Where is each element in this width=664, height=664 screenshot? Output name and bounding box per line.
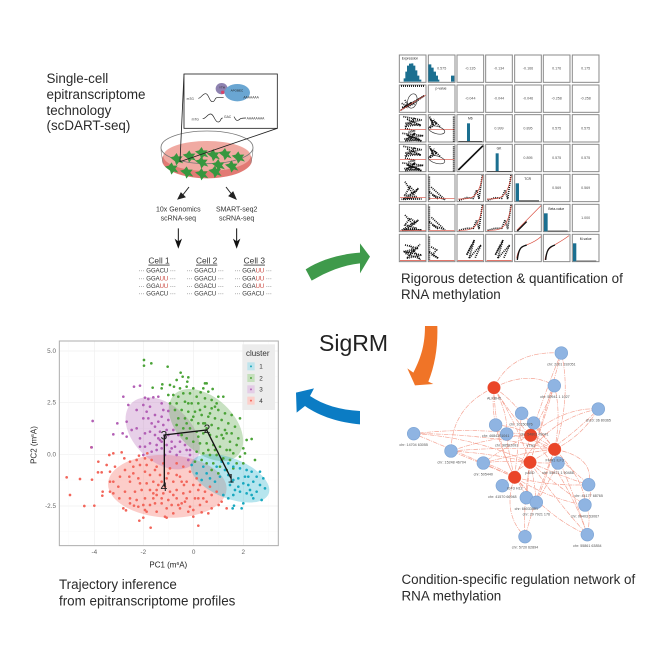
heading: scDART-seq: technology bbox=[46, 103, 112, 118]
node labels: pA0D bbox=[525, 471, 535, 475]
down arrows bbox=[176, 228, 239, 247]
node labels: chr: 59941 1 1027 bbox=[540, 395, 570, 399]
legend: 1 bbox=[259, 364, 263, 371]
heading: regulation network: RNA methylation bbox=[402, 588, 501, 604]
correlation values: 0.575 bbox=[581, 126, 590, 130]
diagonal titles: Expression bbox=[402, 56, 418, 60]
node labels: chr: 29 7921 176 bbox=[523, 513, 550, 517]
diagonal titles: GK bbox=[497, 147, 502, 151]
correlation values: 0.176 bbox=[552, 67, 561, 71]
arrow: blue bbox=[296, 388, 360, 424]
correlation values: -0.166 bbox=[523, 67, 533, 71]
callout box: APOBEC bbox=[231, 88, 244, 92]
arrows from dish to methods bbox=[178, 187, 236, 199]
correlation values: -0.046 bbox=[523, 97, 533, 101]
callout box bbox=[180, 74, 277, 162]
correlation values: 0.575 bbox=[552, 156, 561, 160]
callout box: GAC bbox=[224, 115, 232, 119]
correlation values: -0.044 bbox=[494, 97, 504, 101]
node labels: ALKBH5 bbox=[487, 396, 501, 400]
cell headers bbox=[148, 256, 265, 266]
points: cluster 2 bbox=[144, 360, 255, 473]
axis ticks: 5.0 bbox=[47, 348, 56, 355]
correlation ellipses and diagonals bbox=[406, 93, 555, 260]
diagonal titles: M-value bbox=[580, 237, 592, 241]
legend bbox=[242, 344, 275, 410]
node labels: chr: 41570 66948 bbox=[488, 495, 517, 499]
trajectory labels: 1 bbox=[228, 472, 235, 486]
y axis title: A) bbox=[30, 426, 39, 434]
diagonal histograms bbox=[402, 63, 596, 261]
correlation values: 0.895 bbox=[523, 156, 533, 160]
axis ticks: -4 bbox=[92, 549, 98, 556]
correlation values: 0.575 bbox=[437, 67, 446, 71]
arrow: green bbox=[306, 243, 370, 281]
node labels: chr: 10150376 bbox=[509, 422, 533, 426]
correlation values: -0.258 bbox=[580, 97, 591, 101]
diagonal titles: M6 bbox=[468, 117, 473, 121]
correlation values: 0.575 bbox=[581, 156, 590, 160]
legend: 3 bbox=[259, 387, 263, 394]
heading: rigorous detection: RNA methylation bbox=[401, 287, 501, 302]
method labels: SMART-seq2 bbox=[216, 206, 257, 213]
network nodes: unmodified sites bbox=[407, 347, 605, 543]
correlation values: 0.999 bbox=[494, 126, 504, 130]
node labels: chr: 54871 1 90488 bbox=[542, 471, 574, 475]
panel: regulation network bbox=[399, 347, 611, 550]
diagonal titles: TCR bbox=[524, 177, 532, 181]
legend: cluster bbox=[246, 349, 270, 358]
correlation values: -0.258 bbox=[551, 97, 562, 101]
axis ticks: 0 bbox=[192, 549, 196, 556]
legend: 4 bbox=[259, 398, 263, 405]
panel: pairs matrix bbox=[399, 55, 599, 262]
matrix frames bbox=[399, 55, 599, 262]
heading: scDART-seq: Single-cell bbox=[46, 71, 108, 86]
x axis title: A) bbox=[179, 561, 188, 570]
correlation values: -0.044 bbox=[465, 97, 476, 101]
axis ticks: -2 bbox=[141, 549, 147, 556]
sequence reads: ··· GGAUU ··· bbox=[139, 284, 176, 290]
trajectory labels: 3 bbox=[161, 428, 168, 442]
points: cluster 1 bbox=[192, 462, 265, 508]
node labels: chr: 55861 63854 bbox=[573, 544, 602, 548]
correlation values: -0.135 bbox=[465, 67, 476, 71]
node labels: chr: 15248 46704 bbox=[437, 460, 466, 464]
diagonal titles: Beta-value bbox=[548, 207, 564, 211]
cell headers: Cell 3 bbox=[244, 256, 265, 266]
x axis title: PC1 (m bbox=[149, 561, 176, 570]
method labels: scRNA-seq bbox=[161, 216, 196, 223]
icon: culture dish bbox=[161, 131, 253, 180]
heading: scDART-seq: (scDART-seq) bbox=[46, 118, 130, 133]
callout box: YTH bbox=[219, 85, 225, 89]
node labels: chr: 2201 192051 bbox=[547, 362, 576, 366]
heading: regulation network: Condition-specific regulation network of bbox=[402, 572, 635, 587]
node labels: chr: 09403 53067 bbox=[571, 514, 599, 518]
sequence reads: ··· GGACU ··· bbox=[139, 269, 176, 275]
arrow: orange bbox=[407, 326, 437, 385]
node labels bbox=[399, 362, 611, 550]
correlation values bbox=[437, 67, 591, 220]
correlation values: 0.569 bbox=[581, 186, 590, 190]
node labels: FMR1 ILF3 bbox=[546, 458, 564, 462]
sequence reads: ··· GGAUU ··· bbox=[235, 276, 272, 282]
plot frame and grid bbox=[59, 341, 278, 546]
method labels bbox=[156, 206, 257, 223]
heading: scDART-seq: epitranscriptome bbox=[46, 87, 146, 102]
node labels: chr: 14704 63055 bbox=[399, 443, 428, 447]
callout box: m7G bbox=[192, 117, 199, 121]
label: SigRM: SigRM bbox=[319, 330, 388, 356]
sequence reads: ··· GGACU ··· bbox=[187, 284, 224, 290]
cell headers: Cell 1 bbox=[148, 256, 170, 266]
x axis title: 6 bbox=[176, 561, 179, 567]
network edges bbox=[414, 353, 598, 537]
correlation values: 0.895 bbox=[523, 126, 533, 130]
diagonal titles bbox=[402, 56, 592, 241]
y axis title: PC2 (m bbox=[30, 437, 39, 464]
correlation values: -0.134 bbox=[494, 67, 504, 71]
sequence reads: ··· GGACU ··· bbox=[187, 269, 224, 275]
node labels: chr: 54801 78041 bbox=[520, 432, 549, 436]
node labels: IGF3 H12 bbox=[507, 486, 523, 490]
node labels: chr: 4684301041 bbox=[482, 434, 509, 438]
cell headers: Cell 2 bbox=[196, 256, 218, 266]
node labels: chr: 65033681 bbox=[515, 507, 538, 511]
sequence reads: ··· GGAUU ··· bbox=[139, 276, 176, 282]
panel: culture dish and callout bbox=[161, 74, 277, 180]
points: cluster 4 bbox=[67, 447, 227, 528]
node labels: chr: 44177 68765 bbox=[574, 494, 603, 498]
node labels: YTH2 bbox=[526, 444, 535, 448]
legend: 2 bbox=[259, 375, 263, 382]
sequence reads: ··· GGACU ··· bbox=[187, 291, 224, 297]
lower scatter clouds bbox=[401, 86, 511, 260]
trajectory line bbox=[164, 430, 231, 487]
axis ticks: 0.0 bbox=[47, 451, 56, 458]
axis ticks: 2 bbox=[242, 549, 246, 556]
trajectory labels bbox=[161, 422, 235, 494]
panel: trajectory scatter plot bbox=[30, 341, 278, 570]
panel: sequencing methods and cells bbox=[139, 206, 272, 297]
cluster ellipses bbox=[106, 375, 276, 521]
callout box: AAAAAAAA bbox=[247, 117, 265, 121]
node labels: chr: 96502091 bbox=[495, 443, 518, 447]
sequence reads: ··· GGAUU ··· bbox=[235, 269, 272, 275]
correlation values: 0.175 bbox=[581, 67, 590, 71]
sequence reads: ··· GGACU ··· bbox=[187, 276, 224, 282]
axis ticks: -2.5 bbox=[45, 503, 56, 510]
correlation values: 0.569 bbox=[552, 186, 561, 190]
y axis title: 6 bbox=[30, 434, 36, 437]
trajectory labels: 2 bbox=[204, 422, 211, 436]
diagonal titles: p-value bbox=[436, 87, 447, 91]
method labels: scRNA-seq bbox=[219, 216, 254, 223]
sequence reads: ··· GGAUU ··· bbox=[235, 284, 272, 290]
callout box: AAAAAAA bbox=[243, 96, 260, 100]
network nodes: regulators bbox=[488, 381, 561, 484]
heading: trajectory inference: from epitranscriptome profiles bbox=[59, 594, 236, 608]
plot border bbox=[59, 341, 278, 546]
method labels: 10x Genomics bbox=[156, 206, 201, 213]
correlation values: 0.575 bbox=[552, 126, 561, 130]
correlation values: 1.000 bbox=[581, 216, 590, 220]
node labels: chr: 5720 62894 bbox=[512, 546, 538, 550]
trajectory labels: 4 bbox=[161, 480, 168, 494]
sequence reads bbox=[139, 269, 272, 297]
axis ticks: 2.5 bbox=[47, 400, 56, 407]
node labels: ch10: 36 80365 bbox=[586, 418, 611, 422]
node labels: chr: 505440 bbox=[474, 472, 493, 476]
points: cluster 3 bbox=[92, 386, 190, 460]
axis ticks bbox=[45, 348, 246, 556]
lower fits and curves bbox=[400, 95, 569, 261]
sequence reads: ··· GGACU ··· bbox=[235, 291, 272, 297]
callout box: m7G bbox=[187, 97, 194, 101]
heading: rigorous detection: Rigorous detection & quantification of bbox=[401, 271, 623, 286]
heading: trajectory inference: Trajectory inference bbox=[59, 577, 177, 592]
sequence reads: ··· GGACU ··· bbox=[139, 291, 176, 297]
